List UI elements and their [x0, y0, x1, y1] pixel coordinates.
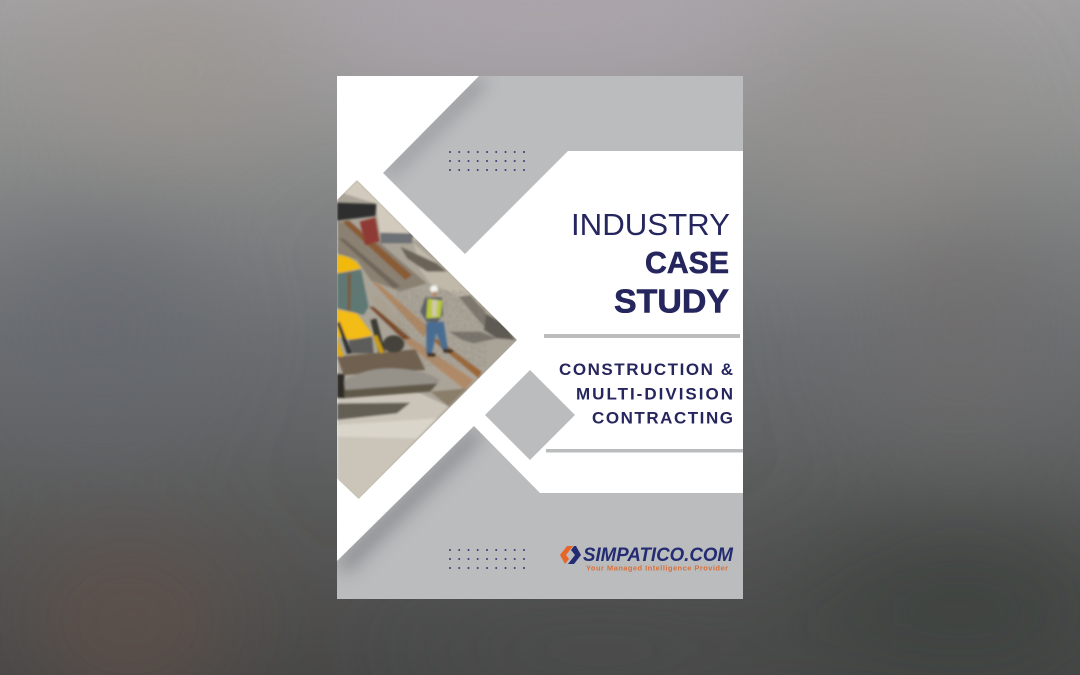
dark debris near the tip: [459, 295, 485, 327]
shadowed trench: [337, 220, 427, 292]
bottom dot grid: [449, 549, 525, 569]
top grey panel: [383, 76, 743, 254]
icon: logo chevrons: [560, 546, 581, 564]
upper rule: [544, 334, 740, 338]
logo wordmark: SIMPATICO.COM: [583, 545, 734, 566]
top dot grid: [449, 151, 525, 171]
bottom grey panel: [337, 426, 743, 599]
logo: Simpatico.com: [560, 545, 734, 572]
title: INDUSTRY: [571, 207, 730, 242]
small grey diamond: [485, 370, 575, 460]
pale lower slab: [337, 392, 449, 500]
construction photo in diamond: [337, 180, 519, 500]
pipes: [370, 280, 432, 337]
title: [571, 207, 730, 320]
excavator bucket and gravel: [337, 349, 425, 375]
excavator wheel: [383, 335, 404, 353]
cover page: [337, 76, 743, 599]
subtitle: CONTRACTING: [592, 408, 733, 428]
pale strip above gravel: [414, 244, 480, 305]
pale concrete strip at the top: [344, 180, 417, 240]
excavator body: [337, 255, 361, 274]
title: CASE: [645, 245, 729, 280]
subtitle: [559, 360, 733, 428]
title: STUDY: [614, 282, 729, 320]
dark boom top: [337, 203, 376, 221]
logo tagline: Your Managed Intelligence Provider: [586, 564, 728, 572]
lower rule: [546, 449, 743, 452]
subtitle: MULTI-DIVISION: [576, 384, 733, 404]
worker: [420, 285, 453, 357]
subtitle: CONSTRUCTION &: [559, 360, 733, 379]
